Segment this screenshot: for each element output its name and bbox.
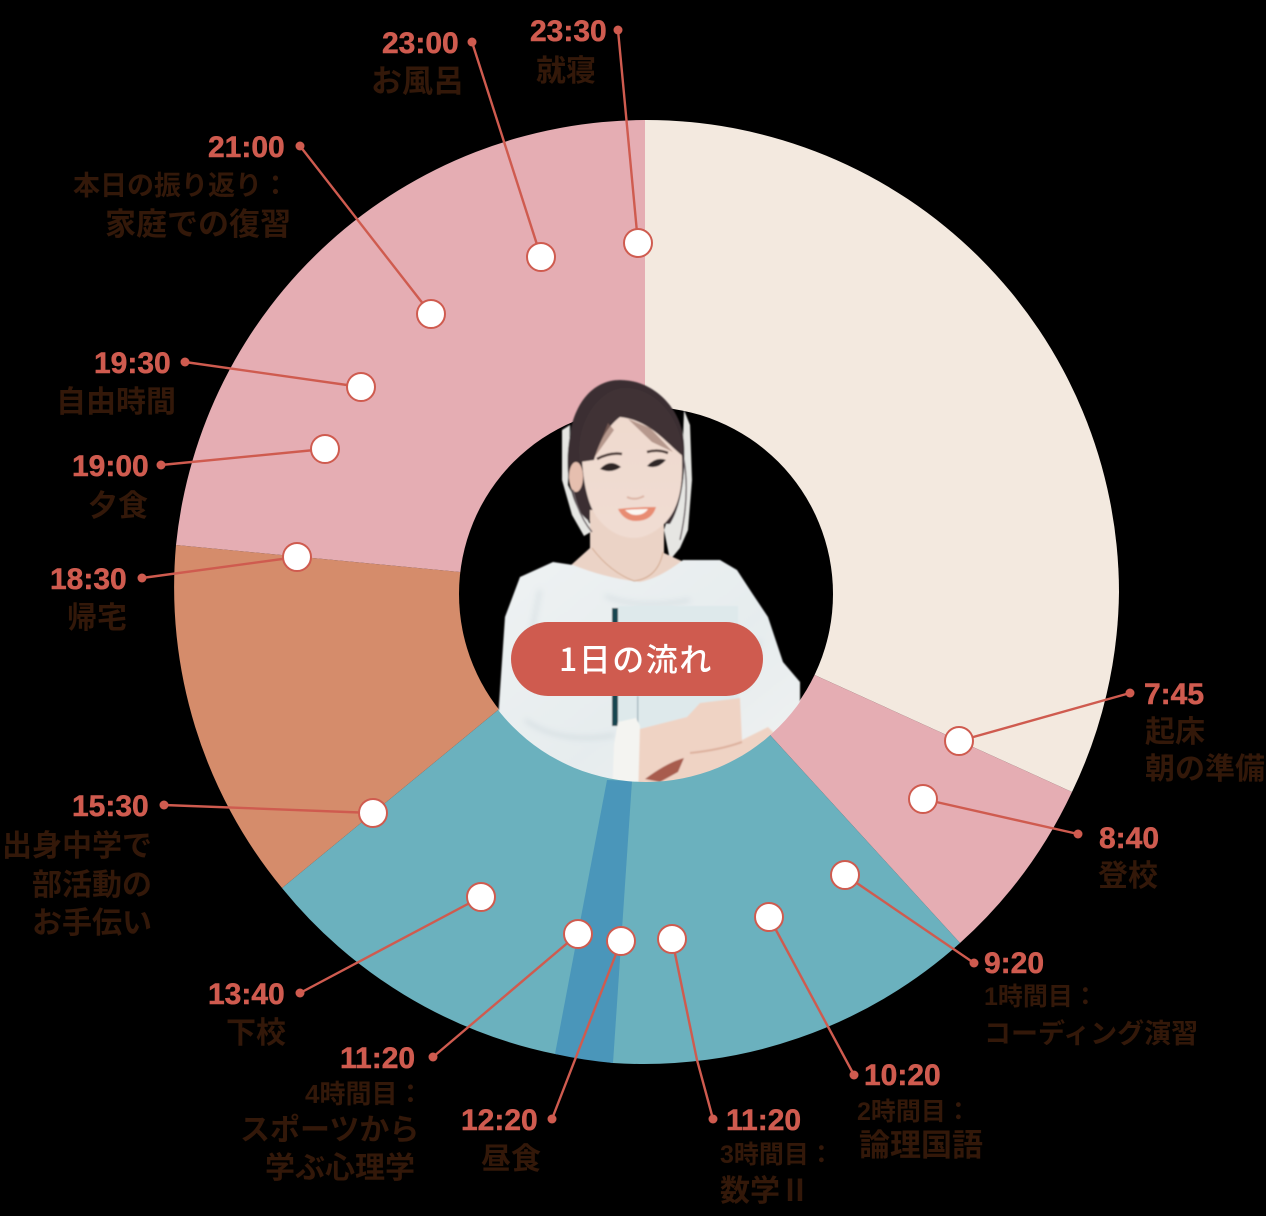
callout: 8:40 登校: 8:40 — [1099, 822, 1159, 855]
callout: 15:30 出身中学で部活動のお手伝い: 出身中学で — [2, 830, 152, 863]
necklace — [592, 548, 663, 581]
callout: 15:30 出身中学で部活動のお手伝い: 15:30 — [72, 790, 149, 823]
teeth — [625, 509, 648, 515]
callout: 9:20 1時間目 コーディング演習 — [831, 861, 1198, 1049]
callout: 15:30 出身中学で部活動のお手伝い — [2, 790, 387, 940]
photo background fringe — [562, 410, 692, 560]
notebook — [618, 606, 739, 728]
callout: 10:20 2時間目 論理国語 — [755, 903, 983, 1163]
callout: 18:30 帰宅: 18:30 — [50, 563, 127, 596]
callout: 11:20 3時間目 数学Ⅱ — [658, 925, 834, 1208]
callout: 21:00 本日の振り返り・家庭での復習: 本日の振り返り： — [73, 171, 289, 201]
finger shadow — [645, 758, 684, 782]
callout: 21:00 本日の振り返り・家庭での復習: 21:00 — [208, 131, 285, 164]
callout: 23:00 お風呂: お風呂 — [371, 64, 464, 99]
callout: 19:00 夕食 — [72, 435, 339, 523]
segment: commute (pink) — [645, 592, 1072, 943]
loose hair strands — [573, 460, 686, 540]
face — [582, 415, 682, 538]
callout: 15:30 出身中学で部活動のお手伝い: 部活動の — [32, 869, 152, 902]
left cuff — [614, 718, 640, 782]
callout: 19:30 自由時間: 自由時間 — [56, 386, 176, 419]
callout: 23:30 就寝: 就寝 — [536, 55, 596, 88]
callout: 23:00 お風呂: 23:00 — [382, 27, 459, 60]
callout: 11:20 4時間目 スポーツから学ぶ心理学: スポーツから — [240, 1114, 419, 1147]
callout: 19:00 夕食: 19:00 — [72, 450, 149, 483]
blouse folds — [528, 594, 686, 740]
callout: 23:00 お風呂 — [371, 27, 555, 271]
callout: 10:20 2時間目 論理国語: 論理国語 — [859, 1128, 983, 1163]
left eyebrow — [597, 454, 622, 459]
callout: 18:30 帰宅 — [50, 543, 311, 635]
left eye — [600, 463, 621, 471]
segment: lunch (dark blue) — [555, 780, 632, 1063]
callout: 23:30 就寝: 23:30 — [530, 15, 607, 48]
title pill: 1日の流れ: 1日の流れ — [559, 635, 713, 681]
blouse — [498, 560, 800, 800]
callout: 7:45 起床・朝の準備 — [945, 678, 1265, 786]
callout: 8:40 登校 — [909, 785, 1159, 893]
right eyebrow — [647, 451, 668, 453]
callout: 11:20 4時間目 スポーツから学ぶ心理学: 学ぶ心理学 — [265, 1152, 415, 1185]
hair back — [568, 380, 684, 524]
callout: 12:20 昼食: 12:20 — [461, 1104, 538, 1137]
segment: club activity (orange) — [174, 545, 645, 888]
callout: 7:45 起床・朝の準備: 朝の準備 — [1145, 753, 1265, 786]
callout: 9:20 1時間目 コーディング演習: 9:20 — [984, 947, 1044, 980]
callout: 9:20 1時間目 コーディング演習: コーディング演習 — [984, 1018, 1198, 1049]
segment: school (teal) — [282, 592, 960, 1064]
callout: 7:45 起床・朝の準備: 起床 — [1145, 716, 1205, 749]
callout: 19:30 自由時間: 19:30 — [94, 347, 171, 380]
callout: 23:30 就寝 — [530, 15, 652, 257]
donut chart: daily schedule — [174, 120, 1119, 1064]
donut hole — [459, 407, 833, 781]
right eye — [647, 459, 666, 467]
photo: student holding a notebook — [498, 380, 800, 800]
callout: 10:20 2時間目 論理国語: 2時間目： — [857, 1098, 971, 1126]
callout: 18:30 帰宅: 帰宅 — [67, 602, 127, 635]
ear — [569, 462, 583, 492]
callout: 10:20 2時間目 論理国語: 10:20 — [864, 1059, 941, 1092]
callout: 11:20 4時間目 スポーツから学ぶ心理学 — [240, 920, 592, 1185]
callout: 11:20 3時間目 数学Ⅱ: 数学Ⅱ — [720, 1175, 810, 1208]
callout: 13:40 下校: 下校 — [226, 1017, 286, 1050]
forearm and hand — [638, 698, 774, 782]
nose shadow — [627, 496, 644, 499]
callout: 9:20 1時間目 コーディング演習: 1時間目： — [984, 983, 1098, 1011]
notebook edge — [637, 696, 638, 736]
fringe — [580, 414, 683, 462]
callout: 11:20 3時間目 数学Ⅱ: 3時間目： — [720, 1141, 834, 1169]
notebook spine — [612, 608, 618, 726]
arm crease — [690, 742, 742, 753]
callout: 12:20 昼食 — [461, 927, 635, 1176]
callout: 19:30 自由時間 — [56, 347, 375, 419]
callout: 15:30 出身中学で部活動のお手伝い: お手伝い — [32, 907, 152, 940]
mouth — [618, 507, 656, 521]
callout: 7:45 起床・朝の準備: 7:45 — [1144, 678, 1204, 711]
callout: 19:00 夕食: 夕食 — [88, 490, 148, 523]
title pill: 1日の流れ — [511, 622, 763, 696]
segment: evening at home (pink) — [176, 120, 645, 592]
segment: morning at home (cream) — [645, 120, 1119, 792]
callout: 12:20 昼食: 昼食 — [481, 1143, 541, 1176]
callout: 8:40 登校: 登校 — [1098, 860, 1158, 893]
callout: 21:00 本日の振り返り・家庭での復習: 家庭での復習 — [105, 207, 291, 242]
callout: 11:20 4時間目 スポーツから学ぶ心理学: 4時間目： — [305, 1079, 423, 1109]
callout: 11:20 3時間目 数学Ⅱ: 11:20 — [726, 1104, 801, 1137]
callout: 11:20 4時間目 スポーツから学ぶ心理学: 11:20 — [340, 1042, 415, 1075]
neck — [570, 508, 682, 583]
callout: 21:00 本日の振り返り・家庭での復習 — [73, 131, 445, 328]
callout: 13:40 下校 — [208, 883, 495, 1050]
callout: 13:40 下校: 13:40 — [208, 978, 285, 1011]
